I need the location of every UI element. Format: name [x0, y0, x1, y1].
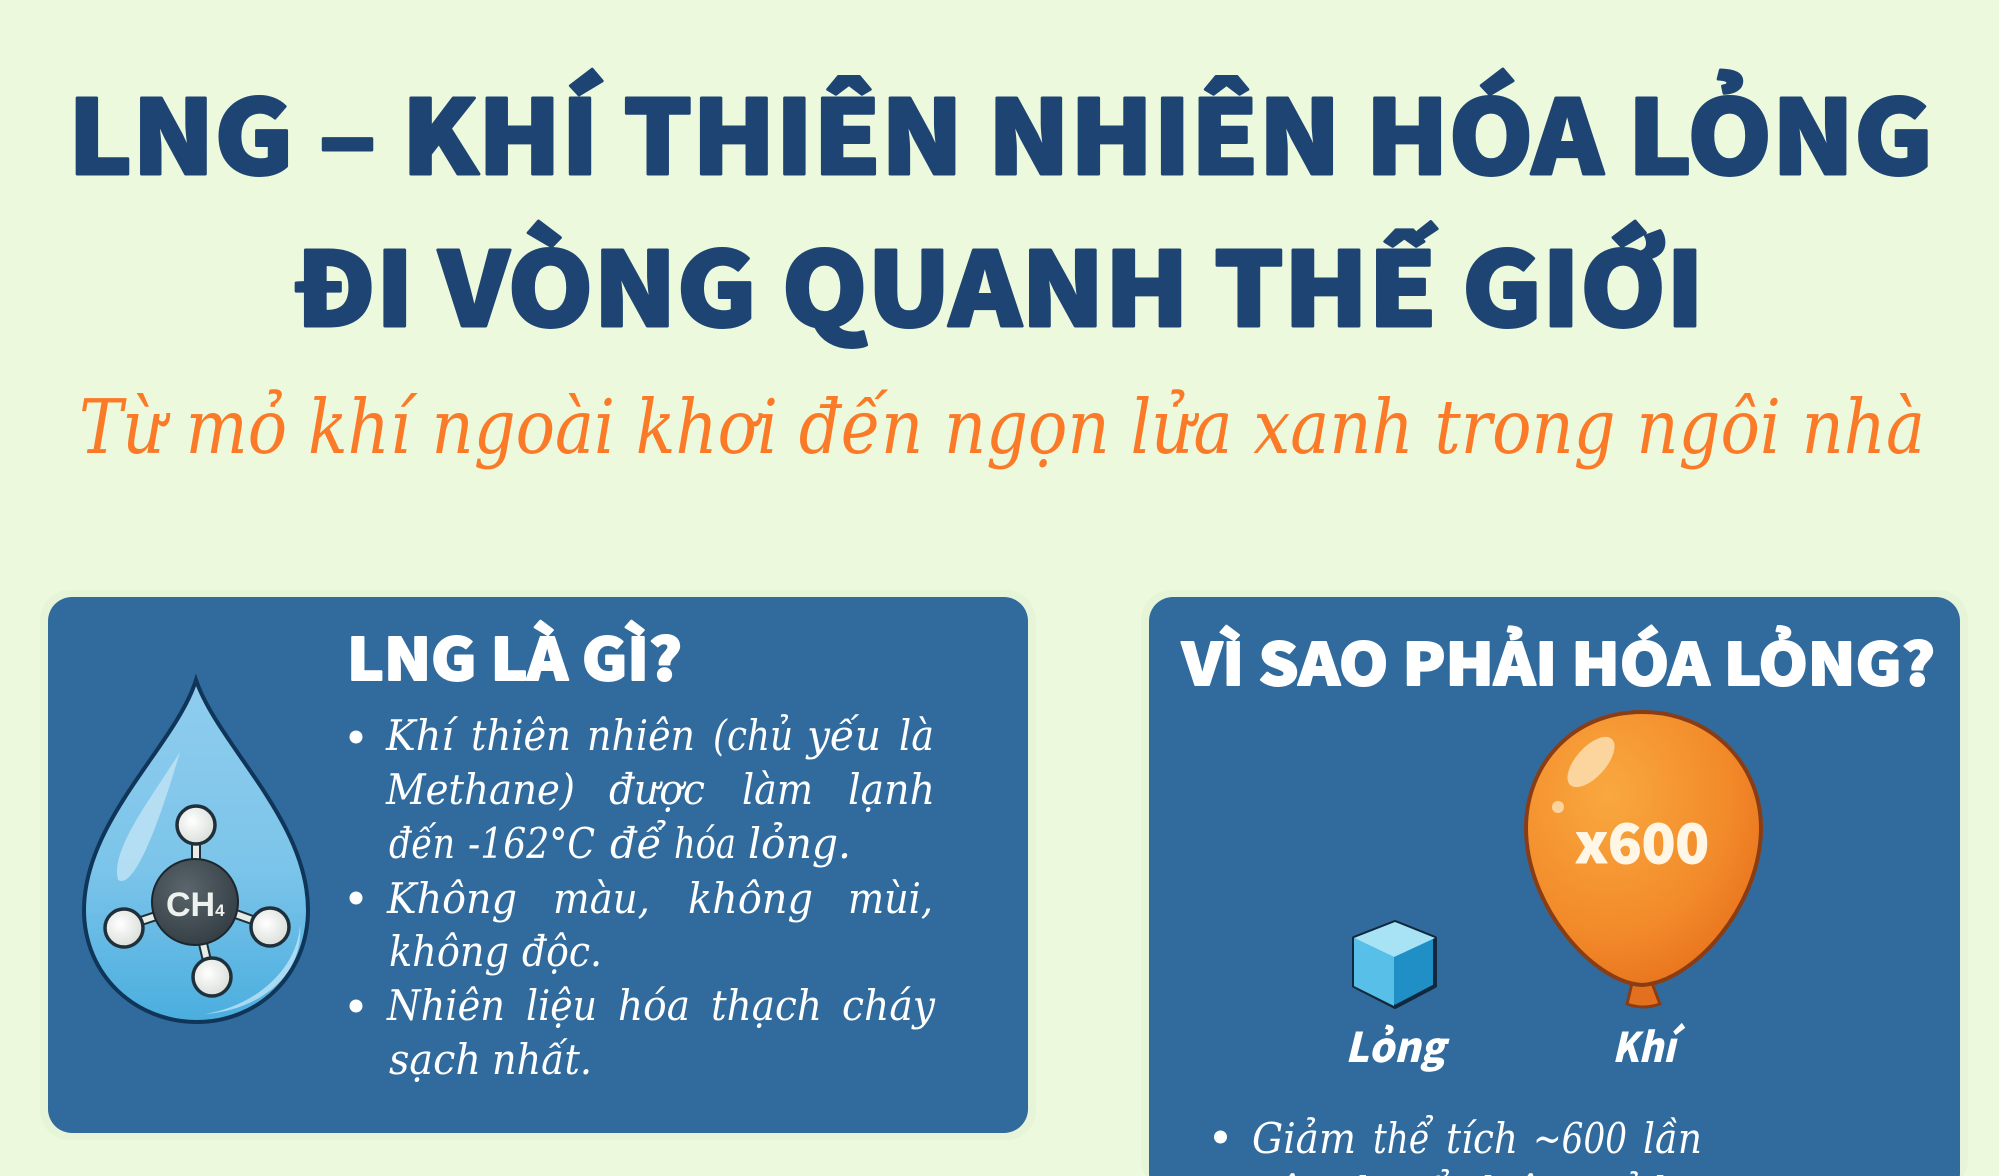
bullet list: lần	[1643, 1114, 1702, 1163]
heading: vì sao phải hóa lỏng: VÌ SAO PHẢI HÓA LỎNG?	[1181, 618, 1935, 702]
label: khí: Khí	[1612, 1014, 1686, 1074]
title	[68, 57, 1933, 356]
bullet list: sạch	[389, 1035, 481, 1084]
bullet list: yếu	[805, 711, 881, 760]
bullet list: tích	[1446, 1114, 1518, 1163]
bullet list: hóa	[618, 981, 690, 1030]
bullet list: để	[610, 819, 666, 868]
bullet list: lạnh	[848, 765, 935, 814]
bullet list: là	[899, 711, 934, 760]
icon: balloon x600	[1526, 712, 1761, 1007]
icon: balloon x600: x600	[1575, 800, 1709, 879]
bullet list: thiên	[471, 711, 571, 760]
bullet list: không	[389, 927, 509, 976]
icon: liquid cube	[1354, 922, 1435, 1007]
panel: vì sao phải hóa lỏng	[1141, 590, 1968, 1176]
bullet list: thạch	[711, 981, 822, 1030]
panel: LNG là gì	[40, 590, 1036, 1140]
icon: water drop with methane molecule	[84, 680, 308, 1022]
bullet list: hóa	[674, 819, 736, 868]
bullet list: Khí	[385, 711, 458, 760]
bullet list: làm	[742, 765, 813, 814]
bullet list: độc.	[522, 927, 602, 976]
bullet list: liệu	[526, 981, 597, 1030]
bullet list: cháy	[842, 981, 936, 1030]
bullet list: thể	[1373, 1114, 1433, 1163]
heading: LNG là gì: LNG LÀ GÌ?	[347, 613, 682, 697]
bullet list: được	[609, 765, 705, 814]
title: ĐI VÒNG QUANH THẾ GIỚI	[293, 209, 1704, 356]
bullet list	[1214, 1114, 1722, 1176]
bullet list: Methane)	[385, 765, 575, 814]
bullet list: nhiên	[587, 711, 695, 760]
bullet list: đến	[389, 819, 455, 868]
bullet list: mùi,	[848, 874, 933, 923]
bullet list	[350, 711, 936, 1084]
title: LNG – KHÍ THIÊN NHIÊN HÓA LỎNG	[68, 57, 1933, 204]
bullet list: nhất.	[492, 1035, 592, 1084]
icon: water drop with methane molecule: CH4	[166, 886, 225, 924]
bullet list: Không	[386, 874, 517, 923]
label: lỏng: Lỏng	[1345, 1014, 1450, 1074]
bullet list: Giảm	[1252, 1114, 1356, 1163]
bullet list: Nhiên	[386, 981, 505, 1030]
bullet list: ~600	[1533, 1114, 1627, 1163]
bullet list: lỏng.	[748, 819, 851, 868]
bullet list: -162°C	[468, 819, 595, 868]
bullet list: (chủ	[713, 711, 793, 760]
bullet list: màu,	[553, 874, 650, 923]
bullet list: không	[688, 874, 813, 923]
